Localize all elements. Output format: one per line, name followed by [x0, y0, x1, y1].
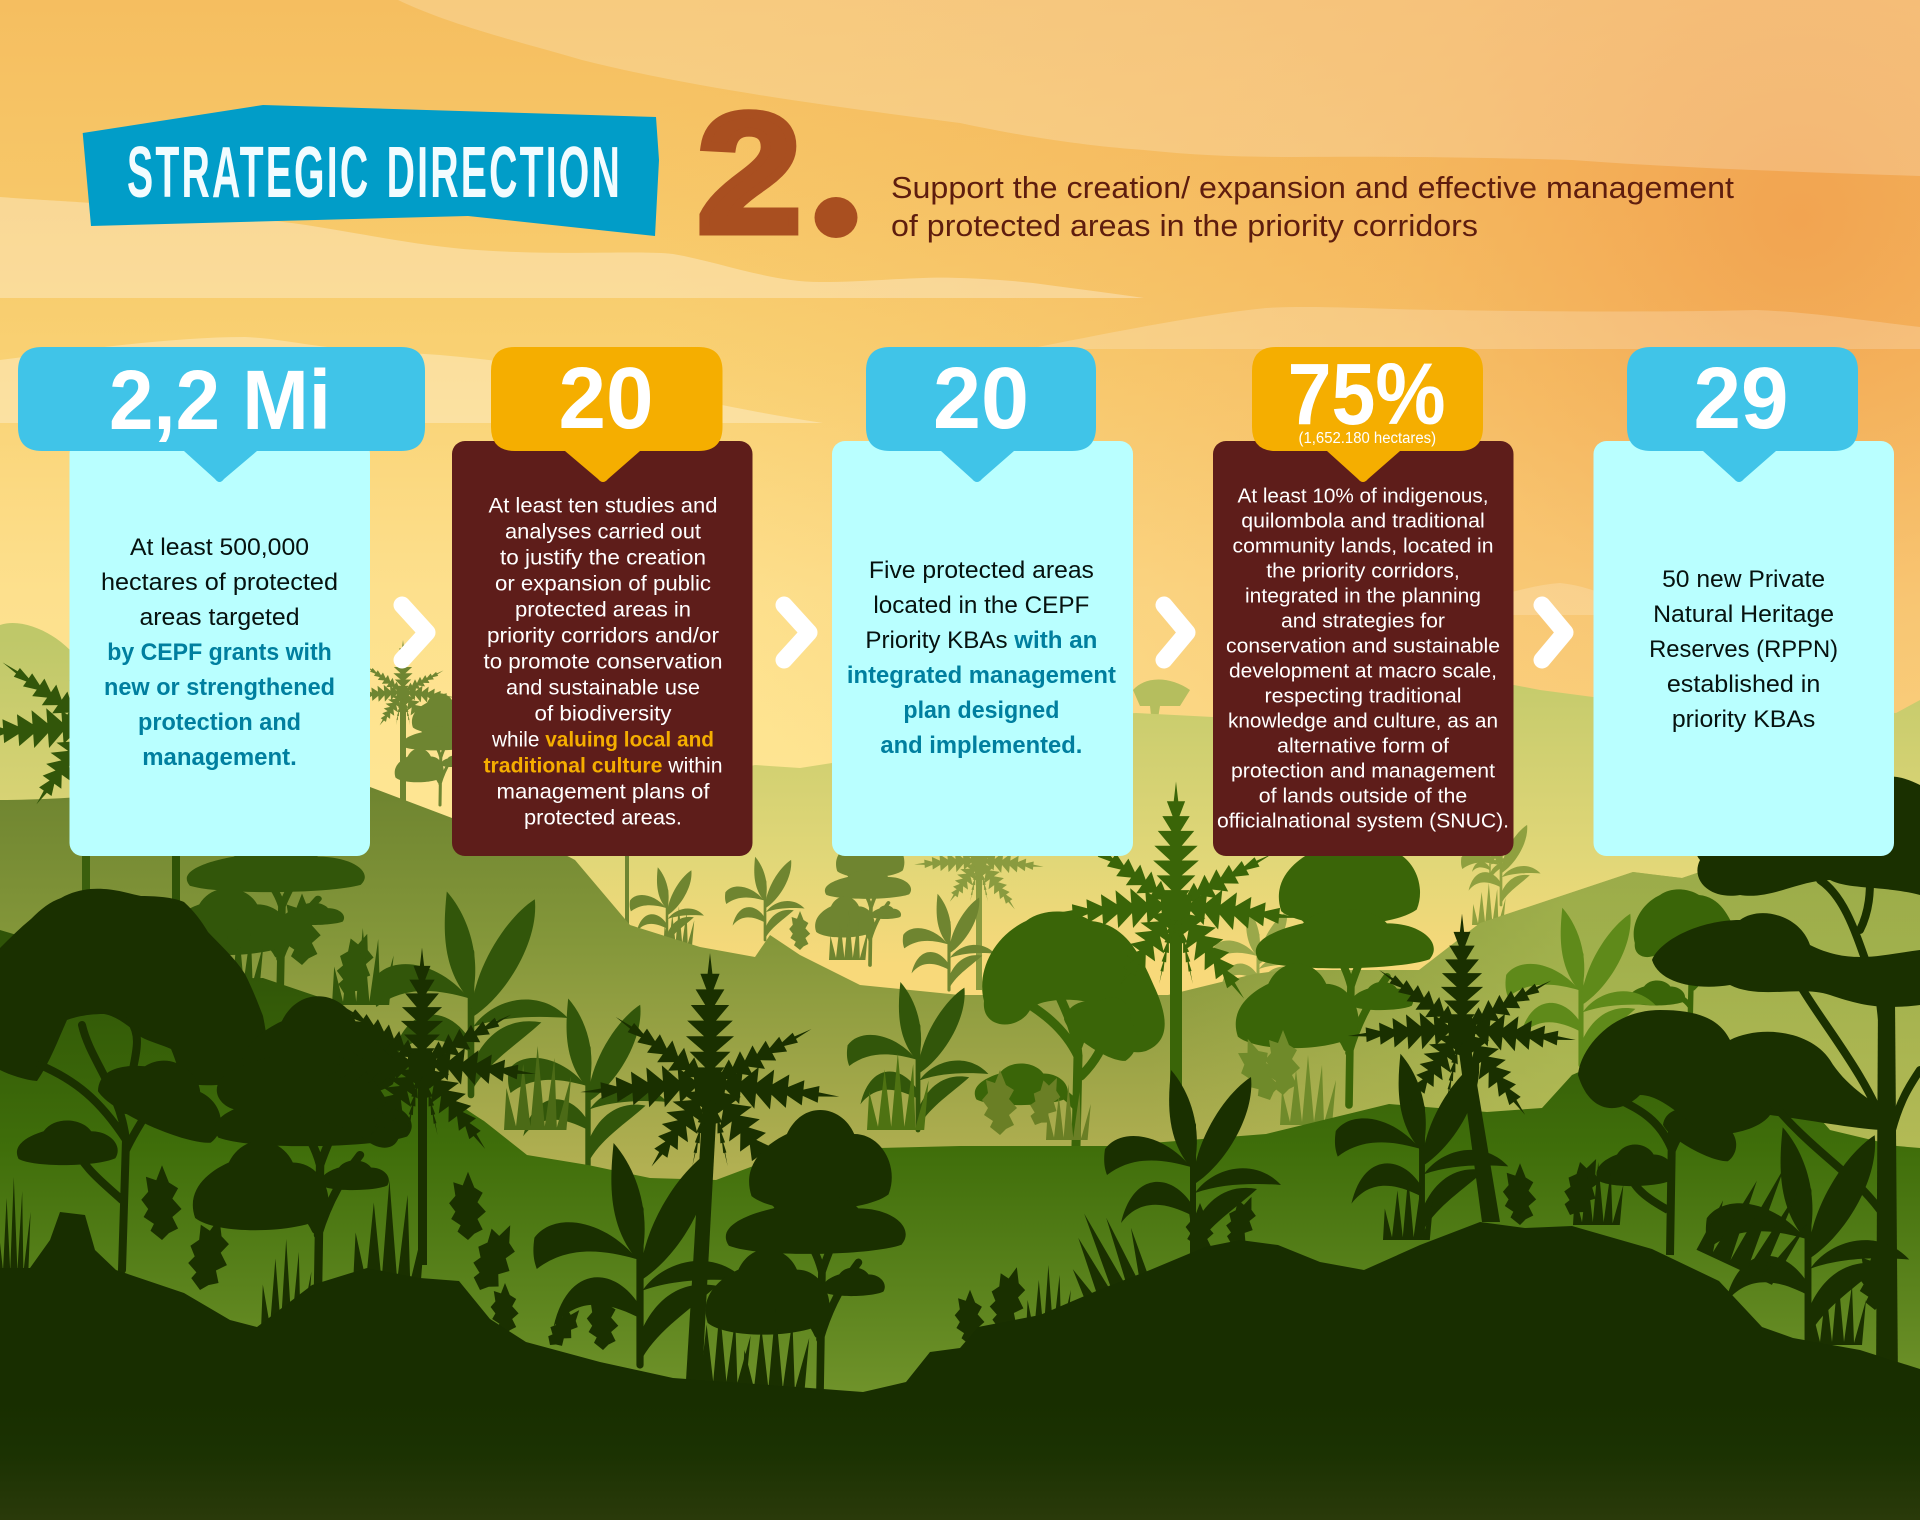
arrow 4: [1542, 605, 1565, 660]
card 2 text: [484, 494, 722, 830]
card 2 text: and sustainable use: [506, 676, 700, 700]
card 5 text: [1649, 566, 1838, 733]
bubble: 75%: 75%: [1288, 346, 1446, 443]
subtitle text: Support the creation/ expansion and effective management: [891, 170, 1734, 205]
panel: card 3: [832, 347, 1133, 856]
rainforest: mid-green trees: [0, 602, 1743, 1165]
header banner: [83, 105, 659, 236]
card 2 text: traditional culture within: [484, 754, 722, 778]
card 1 text: protection and: [138, 709, 301, 736]
card 2 text: to justify the creation: [500, 546, 706, 570]
bubble: 29: 29: [1694, 350, 1788, 447]
large number 2: [698, 80, 858, 267]
card 1 text: [101, 534, 338, 771]
card 3 text: located in the CEPF: [873, 592, 1089, 619]
card 4 text: development at macro scale,: [1229, 661, 1497, 683]
card 3 text: and implemented.: [880, 732, 1082, 759]
panel: card 5: [1594, 347, 1894, 856]
card 4 text: and strategies for: [1281, 611, 1445, 633]
card 1 text: At least 500,000: [130, 534, 309, 561]
card 1 text: by CEPF grants with: [107, 639, 332, 666]
card 4 text: At least 10% of indigenous,: [1238, 486, 1488, 508]
card 4 text: integrated in the planning: [1245, 586, 1481, 608]
card 2 text: management plans of: [496, 780, 710, 804]
bubble: 20: [491, 347, 722, 482]
bubble: 29: [1627, 347, 1858, 482]
card 4 text: of lands outside of the: [1259, 786, 1467, 808]
rainforest: middle hill: [0, 786, 1920, 1300]
banner title: STRATEGIC DIRECTION: [127, 133, 622, 213]
rainforest: dark foreground trees and plants: [0, 776, 1920, 1392]
arrow 1: [402, 605, 427, 660]
bubble: 20: 20: [558, 350, 654, 447]
rainforest: front ground: [0, 1212, 1920, 1520]
card 4 text: respecting traditional: [1264, 686, 1462, 708]
card 2 text: to promote conservation: [484, 650, 722, 674]
arrow 2: [784, 605, 809, 660]
card 1 text: hectares of protected: [101, 569, 338, 596]
bubble: 75%: [1252, 346, 1483, 482]
panel: card 2: [452, 347, 752, 856]
card 5 text: 50 new Private: [1662, 566, 1825, 593]
card 3 text: integrated management: [847, 662, 1116, 689]
rainforest: darker hill: [0, 930, 1920, 1420]
card 3 text: Five protected areas: [869, 557, 1094, 584]
card 4 text: alternative form of: [1277, 736, 1449, 758]
bubble: 20: 20: [933, 350, 1029, 447]
bubble: 20: [866, 347, 1096, 482]
large number 2: 2: [698, 80, 801, 267]
large number 2: .: [828, 140, 855, 241]
panel: card 4: [1213, 346, 1514, 856]
subtitle text: of protected areas in the priority corridors: [891, 208, 1478, 243]
card 5 text: priority KBAs: [1672, 706, 1815, 733]
arrow 3: [1164, 605, 1187, 660]
subtitle text: [891, 170, 1734, 243]
card 2 text: At least ten studies and: [488, 494, 718, 518]
card 3 text: [847, 557, 1116, 759]
card 3 text: Priority KBAs with an: [865, 627, 1097, 654]
card 2 text: protected areas.: [524, 806, 682, 830]
card 1 text: management.: [142, 744, 297, 771]
panel: card 1: [18, 347, 425, 856]
rainforest: olive trees and plants: [351, 640, 1541, 1000]
card 2 text: or expansion of public: [495, 572, 711, 596]
card 2 text: of biodiversity: [534, 702, 672, 726]
card 4 text: [1217, 486, 1509, 833]
card 4 text: quilombola and traditional: [1241, 511, 1485, 533]
card 2 text: while valuing local and: [491, 728, 714, 752]
bubble: 75%: (1,652.180 hectares): [1299, 430, 1436, 447]
bubble: 2,2 Mi: 2,2 Mi: [109, 353, 331, 447]
card 3 text: plan designed: [903, 697, 1059, 724]
card 5 text: Reserves (RPPN): [1649, 636, 1838, 663]
card 4 text: community lands, located in: [1232, 536, 1494, 558]
card 1 text: new or strengthened: [104, 674, 335, 701]
rainforest: far layer: [0, 623, 1920, 1200]
card 2 text: analyses carried out: [505, 520, 701, 544]
card 4 text: knowledge and culture, as an: [1228, 711, 1498, 733]
card 4 text: officialnational system (SNUC).: [1217, 811, 1509, 833]
card 4 text: the priority corridors,: [1266, 561, 1460, 583]
card 2 text: priority corridors and/or: [487, 624, 719, 648]
card 5 text: established in: [1667, 671, 1820, 698]
card 1 text: areas targeted: [140, 604, 300, 631]
card 5 text: Natural Heritage: [1653, 601, 1834, 628]
bubble: 2,2 Mi: [18, 347, 425, 482]
card 2 text: protected areas in: [515, 598, 691, 622]
card 4 text: protection and management: [1231, 761, 1495, 783]
card 4 text: conservation and sustainable: [1226, 636, 1500, 658]
